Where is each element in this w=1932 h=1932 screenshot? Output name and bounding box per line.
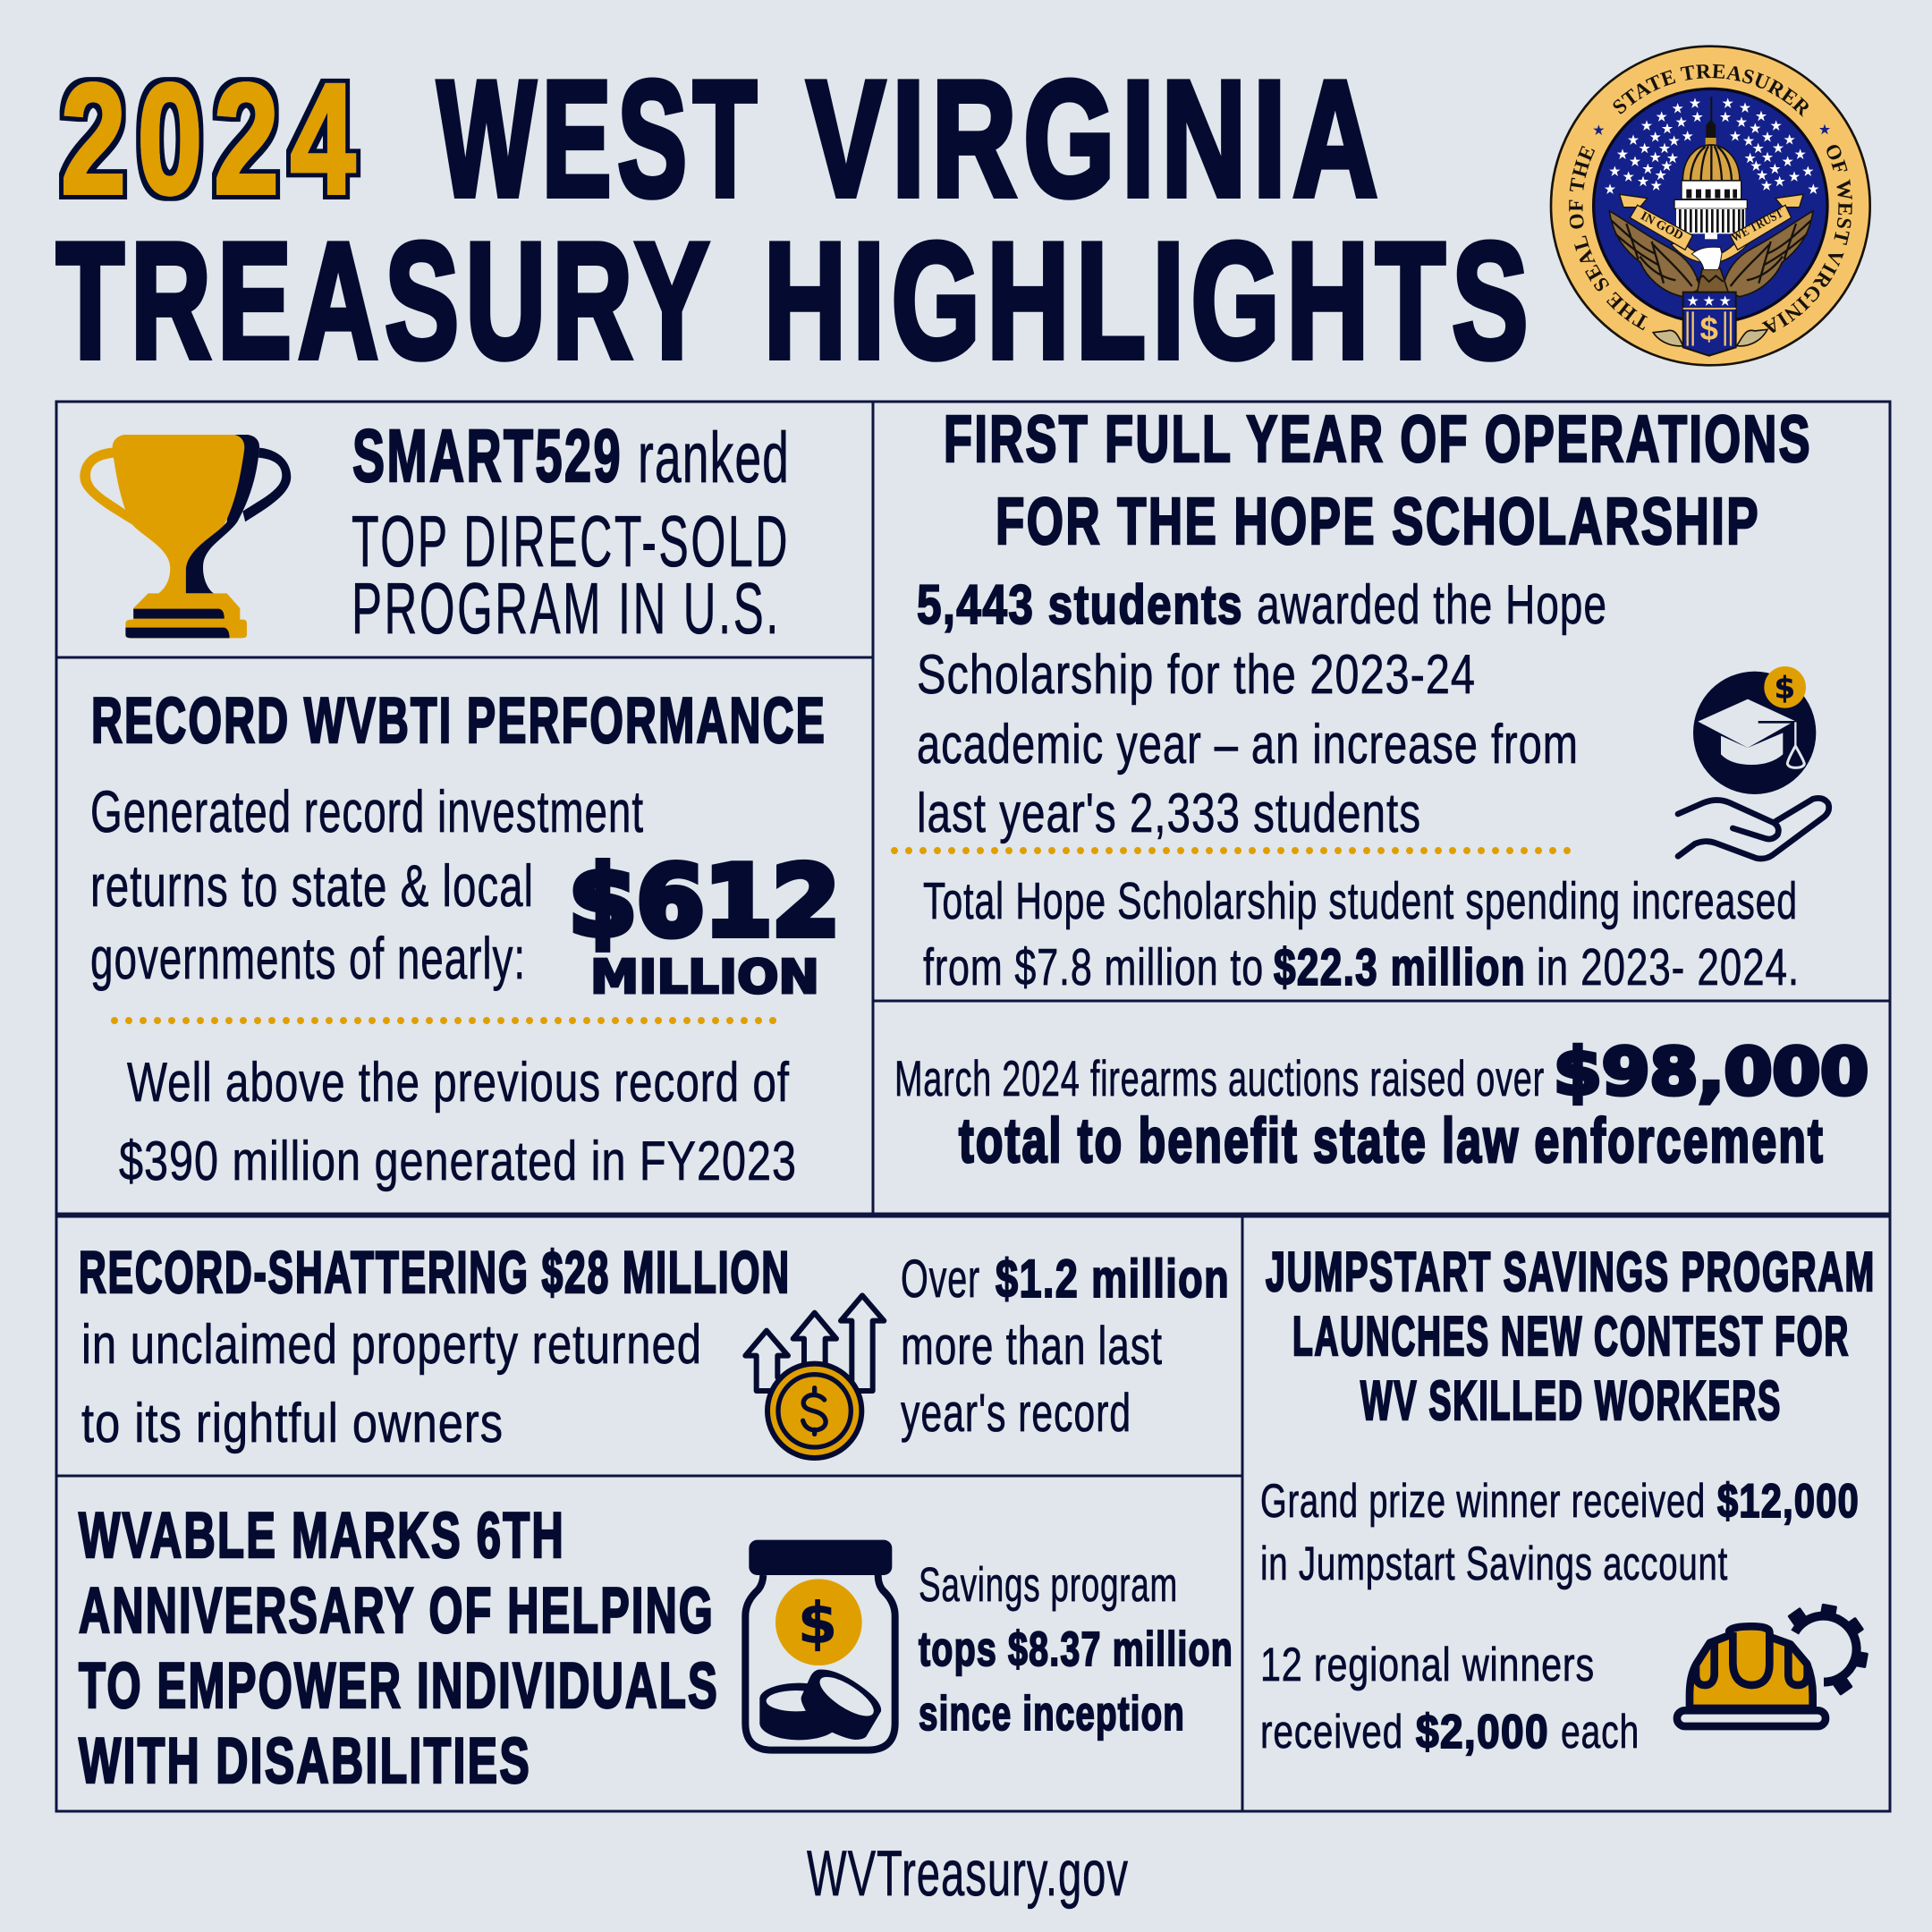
title word: HIGHLIGHTS: HIGHLIGHTS [764, 208, 1535, 392]
seal of the state treasurer: THE SEAL OF THE [1569, 145, 1648, 331]
WVABLE heading: WVABLE MARKS 6TH [79, 1500, 565, 1572]
unclaimed side note: more than last [901, 1316, 1163, 1376]
unclaimed side note: Over [901, 1249, 980, 1309]
Hope body text [917, 574, 1607, 844]
Hope spending text: $22.3 million [1274, 938, 1526, 996]
icon: graduation cap in hand: $ [1775, 670, 1795, 706]
title word: TREASURY: TREASURY [56, 208, 716, 392]
grand prize text: in Jumpstart Savings account [1260, 1538, 1728, 1590]
regional winners text: $2,000 [1416, 1706, 1549, 1758]
WVBTI body text: Generated record investment [90, 778, 644, 844]
panel: Jumpstart [1242, 1216, 1890, 1811]
website footer: WVTreasury.gov [807, 1838, 1129, 1910]
panel: Hope Scholarship [873, 402, 1890, 1001]
unclaimed side note: year's record [901, 1383, 1131, 1443]
WVABLE side note: tops $8.37 million [919, 1623, 1233, 1676]
WVABLE side note [919, 1558, 1233, 1741]
WVABLE side note: Savings program [919, 1558, 1178, 1612]
panel: unclaimed property [56, 1216, 1242, 1476]
WVABLE side note: since inception [919, 1687, 1185, 1741]
panel: WVABLE [56, 1476, 1242, 1811]
WVABLE heading: ANNIVERSARY OF HELPING [79, 1575, 715, 1647]
SMART529 heading: ranked [638, 418, 790, 497]
WVBTI body text: governments of nearly: [90, 925, 526, 991]
Hope body text: last year's 2,333 students [917, 783, 1421, 844]
WVBTI body text [90, 778, 644, 991]
panel: WVBTI performance [56, 657, 873, 1214]
Jumpstart heading [1266, 1241, 1876, 1432]
Hope heading [944, 402, 1812, 558]
stat: $612 million: MILLION [590, 951, 819, 1004]
grand prize text [1260, 1475, 1860, 1590]
panel: firearms auctions [873, 1001, 1890, 1214]
seal of the state treasurer: IN GOD [1639, 208, 1686, 242]
grand prize text: Grand prize winner received [1260, 1475, 1706, 1528]
WVABLE heading [79, 1500, 719, 1797]
Hope body text: awarded the Hope [1257, 574, 1607, 636]
Hope body text: Scholarship for the 2023-24 [917, 644, 1476, 706]
stat: $612 million: $612 [569, 846, 840, 958]
regional winners text: each [1561, 1706, 1640, 1758]
icon: savings jar: $ [798, 1590, 837, 1657]
seal of the state treasurer: STATE TREASURER [1614, 64, 1809, 117]
title [56, 47, 1535, 392]
seal of the state treasurer: OF WEST VIRGINIA [1762, 145, 1852, 333]
seal of the state treasurer: $ [1699, 310, 1718, 347]
Hope spending text: in 2023- 2024. [1537, 938, 1800, 996]
icon: coin with rising arrows [745, 1295, 884, 1458]
WVBTI previous record: $390 million generated in FY2023 [119, 1131, 797, 1192]
panel: SMART529 [56, 402, 873, 657]
WVBTI heading: RECORD WVBTI PERFORMANCE [91, 685, 826, 757]
regional winners text: received [1260, 1706, 1403, 1758]
icon: graduation cap in hand [1678, 666, 1829, 859]
SMART529 description [352, 502, 790, 649]
SMART529 description: PROGRAM IN U.S. [352, 569, 781, 649]
stat: $98,000: $98,000 [1554, 1034, 1868, 1109]
Hope body text: 5,443 students [917, 574, 1243, 636]
Hope spending text: from $7.8 million to [923, 938, 1264, 996]
unclaimed text: in unclaimed property returned [81, 1314, 702, 1376]
unclaimed text: to its rightful owners [81, 1393, 504, 1454]
icon: trophy [80, 435, 291, 638]
grand prize text: $12,000 [1717, 1475, 1860, 1528]
SMART529 description: TOP DIRECT-SOLD [352, 502, 790, 582]
WVBTI previous record: Well above the previous record of [127, 1052, 790, 1114]
unclaimed side note [901, 1249, 1230, 1443]
WVABLE heading: TO EMPOWER INDIVIDUALS [79, 1650, 719, 1722]
title word: WEST: WEST [437, 47, 763, 231]
seal of the state treasurer: WE TRUST [1729, 206, 1785, 245]
unclaimed text [81, 1314, 702, 1454]
regional winners text: 12 regional winners [1260, 1639, 1595, 1691]
SMART529 heading: SMART529 [352, 414, 623, 497]
Hope spending text [923, 872, 1800, 996]
title word: VIRGINIA: VIRGINIA [807, 47, 1385, 231]
regional winners text [1260, 1639, 1640, 1758]
Hope body text: academic year – an increase from [917, 714, 1579, 775]
firearms text: March 2024 firearms auctions raised over [894, 1050, 1545, 1106]
icon: hard hat and gear [1677, 1604, 1868, 1726]
unclaimed heading: RECORD-SHATTERING $28 MILLION [79, 1239, 791, 1305]
WVABLE heading: WITH DISABILITIES [79, 1725, 531, 1797]
WVBTI body text: returns to state & local [90, 852, 534, 919]
title year: 2024 [61, 52, 367, 227]
icon: savings jar [745, 1540, 895, 1750]
unclaimed side note: $1.2 million [996, 1249, 1230, 1309]
WVBTI previous record [119, 1052, 797, 1192]
seal of the state treasurer [1549, 45, 1871, 367]
